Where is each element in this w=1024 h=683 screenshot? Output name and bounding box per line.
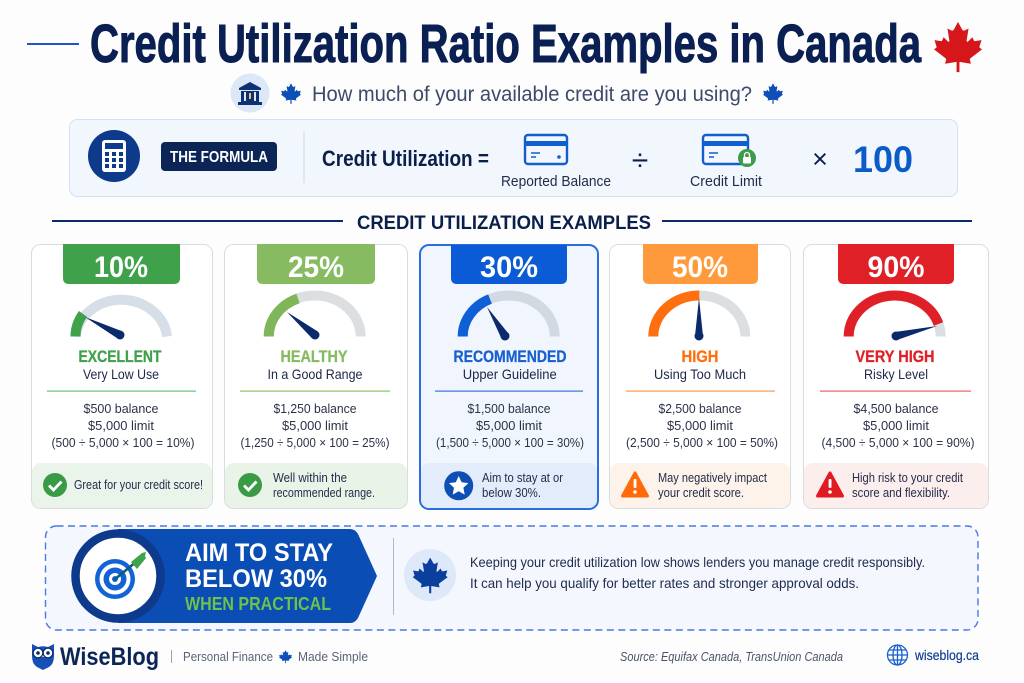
note: High risk to your credit [852, 471, 963, 485]
note: Aim to stay at or [482, 471, 563, 485]
callout text [470, 554, 925, 591]
status detail: Using Too Much [654, 366, 746, 382]
note [225, 463, 407, 508]
callout heading: AIM TO STAY [185, 539, 333, 567]
calculation: $5,000 limit [88, 418, 154, 433]
callout heading: BELOW 30% [185, 565, 327, 593]
badge: 25% [257, 244, 375, 284]
calculation: $1,250 balance [274, 401, 356, 416]
panel: 30% recommended [420, 245, 598, 509]
icon: credit limit card with lock [703, 135, 756, 167]
icon: calculator [88, 130, 140, 182]
calculation: (1,250 ÷ 5,000 × 100 = 25%) [240, 435, 390, 450]
icon: target [76, 534, 160, 618]
badge: 90% [838, 244, 954, 284]
formula text: Credit Utilization = [322, 146, 489, 171]
note [610, 463, 790, 508]
calculation: $2,500 balance [658, 401, 742, 416]
note: Well within the [273, 471, 347, 485]
status: HEALTHY [280, 347, 348, 366]
status detail: In a Good Range [268, 366, 363, 382]
source: Source: Equifax Canada, TransUnion Canada [620, 650, 843, 664]
status detail: Risky Level [864, 366, 928, 382]
badge: 10% [63, 244, 180, 284]
icon: maple leaf badge [404, 549, 456, 601]
value 100: 100 [853, 139, 913, 180]
tagline [171, 649, 368, 664]
calculation [240, 401, 390, 450]
formula label: THE FORMULA [170, 149, 268, 166]
note: Great for your credit score! [74, 478, 203, 492]
panel: 50% high [610, 244, 790, 508]
callout text: It can help you qualify for better rates and stronger approval odds. [470, 575, 859, 591]
icon: blue maple leaf right [763, 83, 783, 104]
gauge: 50% [653, 296, 745, 340]
note: below 30%. [482, 486, 541, 500]
note: score and flexibility. [852, 486, 950, 500]
calculation [52, 401, 194, 450]
note: your credit score. [658, 486, 744, 500]
panel: banner [46, 526, 978, 630]
website: wiseblog.ca [914, 647, 979, 663]
calculation: (2,500 ÷ 5,000 × 100 = 50%) [626, 435, 778, 450]
note: May negatively impact [658, 471, 767, 485]
icon: reported balance card [525, 135, 567, 164]
icon: bank [230, 74, 270, 112]
callout heading: WHEN PRACTICAL [185, 594, 331, 614]
formula label [161, 142, 277, 171]
badge: 30% [451, 245, 567, 284]
note [32, 463, 212, 508]
panel: 90% very high [804, 244, 988, 508]
icon: globe [888, 645, 908, 665]
tagline: Personal Finance [183, 649, 273, 664]
gauge: 90% [849, 295, 941, 340]
calculation: $5,000 limit [476, 418, 542, 433]
panel: formula [70, 120, 958, 196]
calculation: (1,500 ÷ 5,000 × 100 = 30%) [436, 435, 584, 450]
badge: 30%: 30% [480, 251, 538, 284]
calculation: $5,000 limit [282, 418, 348, 433]
calculation: $1,500 balance [468, 401, 550, 416]
badge: 25%: 25% [288, 251, 344, 284]
gauge: 30% [463, 295, 555, 340]
status: HIGH [682, 347, 718, 366]
callout heading [185, 539, 333, 614]
icon: owl logo [32, 644, 54, 670]
calculation: (500 ÷ 5,000 × 100 = 10%) [52, 435, 194, 450]
icon: red maple leaf [934, 22, 982, 72]
arrow banner [118, 529, 377, 623]
note [421, 463, 597, 508]
panel: 25% healthy [224, 244, 408, 508]
label: credit limit: Credit Limit [690, 173, 763, 190]
status: VERY HIGH [856, 347, 934, 366]
badge: 50%: 50% [672, 251, 728, 284]
badge: 90%: 90% [868, 251, 924, 284]
calculation [436, 401, 584, 450]
badge: 10%: 10% [94, 251, 148, 284]
gauge: 25% [269, 295, 361, 340]
calculation [822, 401, 974, 450]
calculation: $500 balance [84, 401, 158, 416]
calculation: $5,000 limit [667, 418, 733, 433]
section heading: CREDIT UTILIZATION EXAMPLES [357, 213, 651, 234]
panel: 10% excellent [32, 244, 212, 508]
badge: 50% [643, 244, 758, 284]
icon: blue maple leaf left [281, 83, 301, 104]
subtitle: How much of your available credit are you using? [312, 83, 752, 106]
tagline: Made Simple [298, 649, 368, 664]
status: EXCELLENT [78, 347, 162, 366]
calculation: $4,500 balance [854, 401, 938, 416]
status detail: Upper Guideline [463, 366, 557, 382]
label: reported balance: Reported Balance [501, 173, 611, 190]
note [804, 463, 988, 508]
gauge: 10% [75, 300, 167, 340]
calculation [626, 401, 778, 450]
multiply sign: × [812, 144, 828, 174]
divide sign: ÷ [632, 144, 648, 177]
calculation: (4,500 ÷ 5,000 × 100 = 90%) [822, 435, 974, 450]
calculation: $5,000 limit [863, 418, 929, 433]
logo text: WiseBlog [60, 643, 159, 671]
callout text: Keeping your credit utilization low shows lenders you manage credit responsibly. [470, 554, 925, 570]
status detail: Very Low Use [83, 366, 159, 382]
note: recommended range. [273, 486, 375, 500]
status: RECOMMENDED [454, 347, 566, 366]
